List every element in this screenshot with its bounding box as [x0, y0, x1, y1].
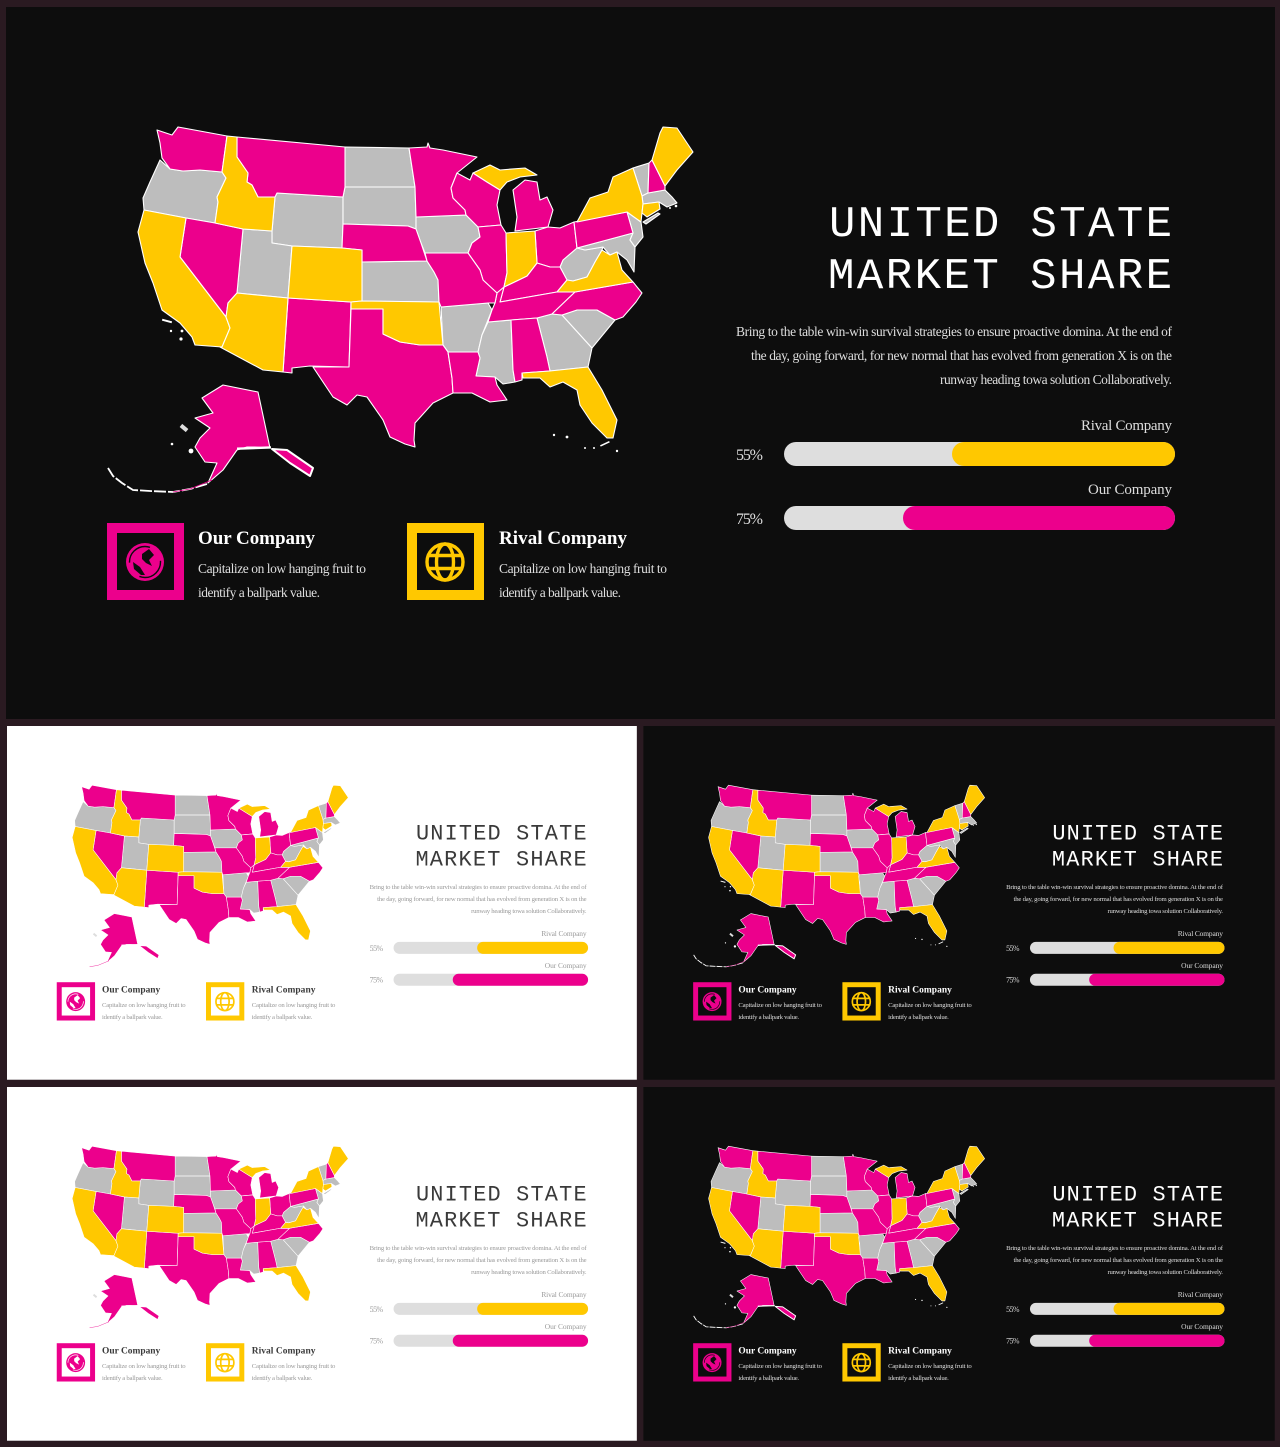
legend: rival company: Rival Company	[499, 528, 628, 549]
title	[415, 821, 587, 872]
legend: our company: identify a ballpark value.	[102, 1014, 163, 1021]
bar: rival company 55%: 55%	[1006, 1305, 1020, 1314]
title: MARKET SHARE	[828, 252, 1172, 302]
bar: our company 75%: Our Company	[1181, 1322, 1223, 1331]
description text: runway heading towa solution Collaboratively.	[471, 908, 587, 915]
legend: rival company: Rival Company	[252, 986, 316, 996]
description text: Bring to the table win-win survival strategies to ensure proactive domina. At the end of	[1006, 1245, 1224, 1252]
bar: our company 75%	[736, 482, 1175, 530]
bar: our company 75%: 75%	[736, 511, 763, 528]
description text: runway heading towa solution Collaboratively.	[471, 1269, 587, 1276]
bar: rival company 55%: 55%	[736, 447, 763, 464]
description text: runway heading towa solution Collaboratively.	[940, 372, 1172, 387]
bar: our company 75%	[1006, 961, 1224, 986]
bar: our company 75%: 75%	[370, 976, 383, 985]
bar: our company 75%: 75%	[1006, 976, 1020, 985]
bar: rival company 55%: Rival Company	[1178, 929, 1223, 938]
description text: the day, going forward, for new normal that has evolved from generation X is on the	[1014, 896, 1223, 903]
legend: rival company: Capitalize on low hanging fruit to	[499, 561, 667, 576]
description text: the day, going forward, for new normal that has evolved from generation X is on the	[1014, 1257, 1223, 1264]
legend: rival company: identify a ballpark value.	[252, 1375, 313, 1382]
map	[694, 1146, 985, 1328]
legend: our company	[693, 982, 823, 1021]
map	[694, 785, 985, 967]
legend: our company: Our Company	[738, 986, 797, 996]
description text: the day, going forward, for new normal that has evolved from generation X is on the	[377, 1257, 587, 1264]
title: MARKET SHARE	[1052, 1208, 1223, 1233]
title: MARKET SHARE	[1052, 847, 1223, 872]
map	[57, 785, 348, 967]
bar: rival company 55%: Rival Company	[541, 929, 587, 938]
legend: our company: Capitalize on low hanging fruit to	[198, 561, 366, 576]
panel: light slide top left	[7, 726, 637, 1080]
title: MARKET SHARE	[415, 847, 587, 872]
bar: our company 75%: Our Company	[545, 961, 587, 970]
map	[57, 1146, 348, 1328]
legend: rival company: Rival Company	[888, 986, 952, 996]
description text: Bring to the table win-win survival strategies to ensure proactive domina. At the end of	[1006, 884, 1224, 891]
bar: rival company 55%: Rival Company	[541, 1290, 587, 1299]
title	[415, 1182, 587, 1233]
bar: our company 75%: Our Company	[545, 1322, 587, 1331]
bar: rival company 55%: Rival Company	[1178, 1290, 1223, 1299]
description text: the day, going forward, for new normal that has evolved from generation X is on the	[377, 896, 587, 903]
bar: rival company 55%: 55%	[370, 944, 383, 953]
bar: our company 75%: 75%	[370, 1337, 383, 1346]
bar: rival company 55%	[736, 418, 1175, 466]
description text: the day, going forward, for new normal that has evolved from generation X is on the	[751, 348, 1172, 363]
legend: rival company: Capitalize on low hanging fruit to	[252, 1002, 336, 1009]
description text	[1006, 1245, 1224, 1276]
bar: rival company 55%: 55%	[370, 1305, 383, 1314]
bar: our company 75%: Our Company	[1181, 961, 1223, 970]
legend: our company	[107, 523, 366, 600]
description text	[370, 884, 587, 915]
title: UNITED STATE	[416, 821, 587, 846]
legend: rival company	[842, 1343, 972, 1382]
legend: our company: identify a ballpark value.	[102, 1375, 163, 1382]
bar: rival company 55%	[370, 1290, 588, 1315]
legend: rival company: identify a ballpark value.	[888, 1375, 949, 1382]
legend: rival company	[206, 982, 336, 1021]
legend: our company: identify a ballpark value.	[738, 1375, 799, 1382]
legend: our company: Our Company	[198, 528, 316, 549]
legend: our company: Our Company	[102, 986, 161, 996]
legend: our company	[693, 1343, 823, 1382]
legend: rival company: Capitalize on low hanging fruit to	[888, 1363, 972, 1370]
title: MARKET SHARE	[415, 1208, 587, 1233]
panel: main dark slide	[6, 7, 1275, 719]
bar: rival company 55%	[370, 929, 588, 954]
panel: dark slide top right	[643, 726, 1275, 1080]
legend: our company: Capitalize on low hanging fruit to	[102, 1363, 186, 1370]
title	[1052, 1182, 1223, 1233]
legend: rival company: Capitalize on low hanging fruit to	[888, 1002, 972, 1009]
bar: rival company 55%	[1006, 929, 1224, 954]
legend: our company: Capitalize on low hanging fruit to	[738, 1363, 823, 1370]
description text: Bring to the table win-win survival strategies to ensure proactive domina. At the end of	[736, 324, 1172, 339]
legend: our company	[57, 1343, 186, 1382]
legend: rival company: identify a ballpark value.	[499, 585, 621, 600]
legend: rival company: Rival Company	[888, 1347, 952, 1357]
map: US states market share	[108, 127, 693, 492]
legend: rival company: identify a ballpark value.	[888, 1014, 949, 1021]
legend: rival company: Capitalize on low hanging fruit to	[252, 1363, 336, 1370]
description text	[736, 324, 1172, 387]
bar: our company 75%: 75%	[1006, 1337, 1020, 1346]
description text	[1006, 884, 1224, 915]
description text	[370, 1245, 587, 1276]
legend: our company: Capitalize on low hanging fruit to	[102, 1002, 186, 1009]
title: UNITED STATE	[829, 200, 1172, 250]
panel: dark slide bottom right	[643, 1087, 1275, 1441]
description text: Bring to the table win-win survival strategies to ensure proactive domina. At the end of	[370, 884, 587, 891]
description text: Bring to the table win-win survival strategies to ensure proactive domina. At the end of	[370, 1245, 587, 1252]
bar: our company 75%	[370, 1322, 588, 1347]
legend: rival company	[842, 982, 972, 1021]
legend: our company: Our Company	[102, 1347, 161, 1357]
title	[1052, 821, 1223, 872]
legend: rival company: identify a ballpark value.	[252, 1014, 313, 1021]
legend: our company: identify a ballpark value.	[738, 1014, 799, 1021]
legend: our company: Our Company	[738, 1347, 797, 1357]
bar: rival company 55%: Rival Company	[1081, 418, 1172, 434]
bar: our company 75%	[1006, 1322, 1224, 1347]
legend: our company: identify a ballpark value.	[198, 585, 320, 600]
title	[828, 200, 1172, 302]
bar: our company 75%: Our Company	[1088, 482, 1172, 498]
description text: runway heading towa solution Collaboratively.	[1108, 1269, 1223, 1276]
title: UNITED STATE	[416, 1182, 587, 1207]
legend: rival company	[206, 1343, 336, 1382]
legend: our company: Capitalize on low hanging fruit to	[738, 1002, 823, 1009]
bar: rival company 55%: 55%	[1006, 944, 1020, 953]
panel: light slide bottom left	[7, 1087, 637, 1441]
legend: rival company: Rival Company	[252, 1347, 316, 1357]
legend: rival company	[407, 523, 667, 600]
bar: rival company 55%	[1006, 1290, 1224, 1315]
title: UNITED STATE	[1052, 1182, 1223, 1207]
bar: our company 75%	[370, 961, 588, 986]
legend: our company	[57, 982, 186, 1021]
description text: runway heading towa solution Collaboratively.	[1108, 908, 1223, 915]
title: UNITED STATE	[1052, 821, 1223, 846]
